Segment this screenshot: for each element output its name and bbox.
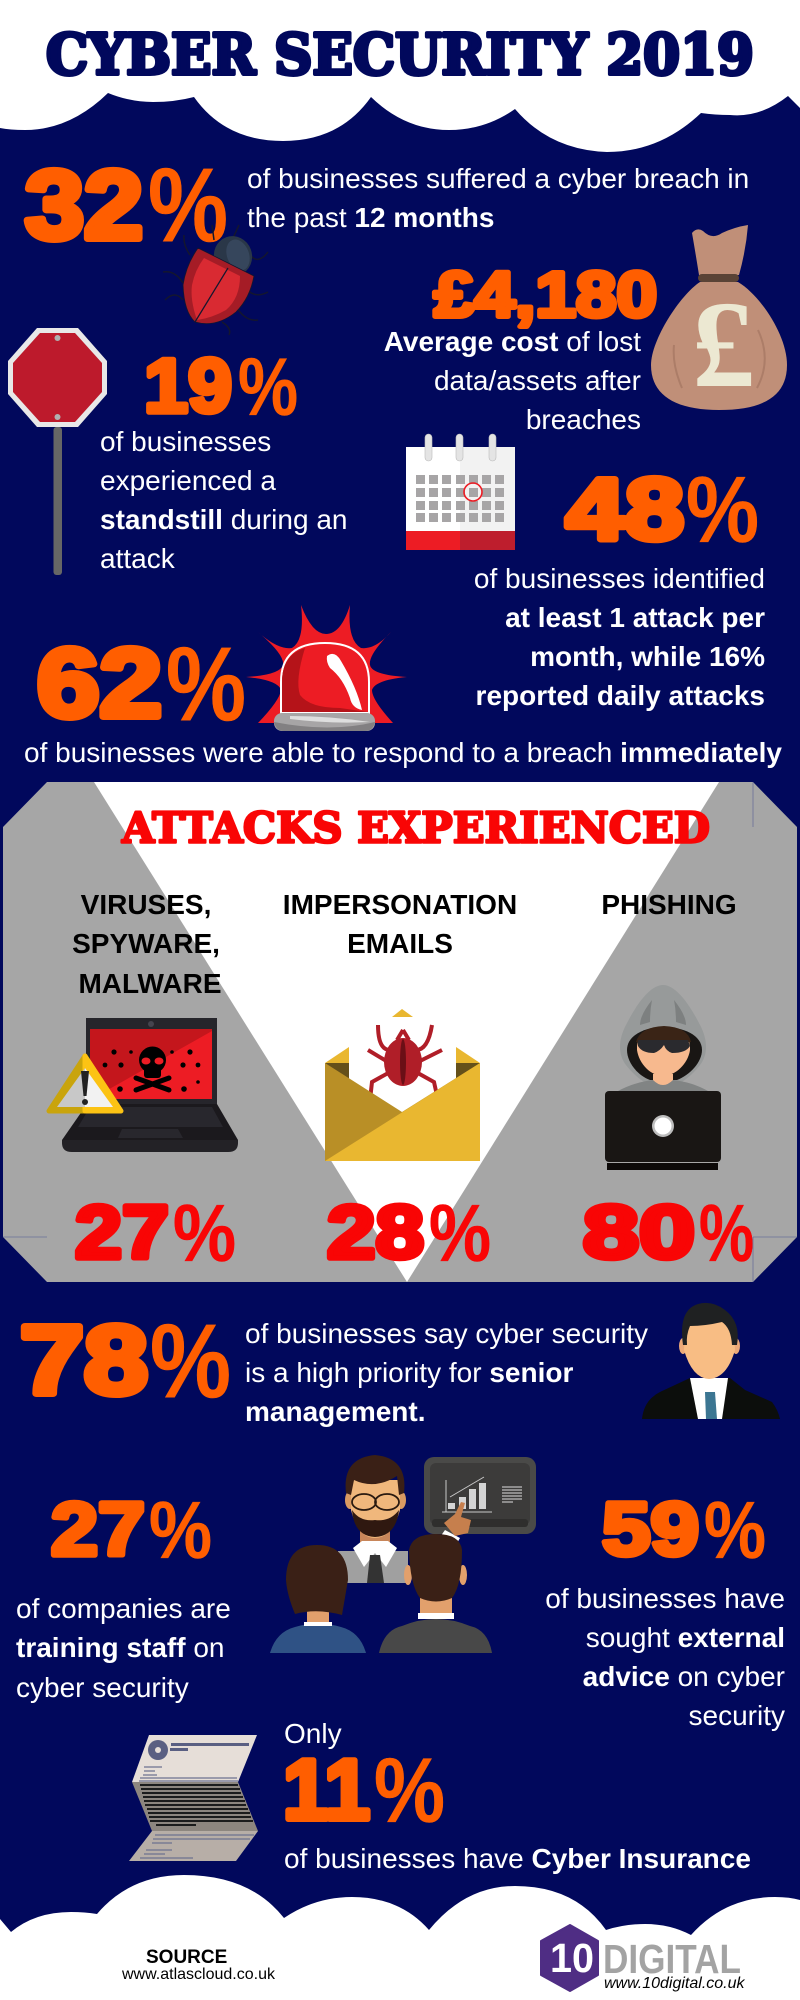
footer cloud	[0, 1875, 800, 2000]
stat: 78%: 78	[20, 1306, 148, 1414]
header cloud	[0, 0, 800, 152]
stat: 19%: 19	[144, 344, 232, 429]
text: training description: cyber security	[16, 1672, 189, 1703]
text: only: Only	[284, 1718, 342, 1749]
label: viruses: MALWARE	[78, 968, 222, 999]
panel: attacks experienced	[3, 782, 797, 1282]
label: impersonation emails: EMAILS	[347, 928, 453, 959]
text: external advice description: advice on cyber	[583, 1661, 785, 1692]
stat: 11%	[283, 1740, 445, 1842]
stat: 48%: 48	[566, 461, 684, 558]
icon: money bag	[651, 225, 787, 413]
stat: 27% training	[51, 1486, 212, 1576]
icon: envelope with bug	[325, 1009, 480, 1161]
stat: 80% phishing: %	[699, 1189, 754, 1279]
icon: infected laptop	[49, 1018, 238, 1152]
stat: 27% viruses	[75, 1189, 236, 1279]
label: viruses: VIRUSES,	[81, 889, 211, 920]
text: average cost description: Average cost of lost	[384, 326, 641, 357]
stat: 80% phishing	[583, 1189, 754, 1279]
stat: 19%	[144, 342, 298, 433]
source credit: SOURCE	[146, 1947, 227, 1968]
text: average cost description: breaches	[526, 404, 641, 435]
text: 48% description: reported daily attacks	[476, 680, 765, 711]
stat: 62%	[37, 626, 246, 743]
stat: 27% viruses: %	[173, 1189, 236, 1279]
source credit: www.atlascloud.co.uk	[121, 1966, 276, 1983]
text: training description: of companies are	[16, 1593, 231, 1624]
stat: 59%	[602, 1486, 766, 1576]
label: phishing: PHISHING	[601, 889, 737, 920]
text: 19% description: of businesses	[100, 426, 271, 457]
title: CYBER SECURITY 2019	[46, 22, 754, 88]
stat: 78%	[20, 1303, 231, 1420]
stat: 62%: %	[166, 626, 246, 743]
stat: 59%: 59	[602, 1487, 699, 1571]
stat: 28% impersonation	[327, 1189, 491, 1279]
stat: 32% breach: 32	[25, 150, 143, 260]
stat: 62%: 62	[37, 628, 162, 738]
text: 48% description: of businesses identified	[474, 563, 765, 594]
stat: 32% breach	[25, 147, 228, 264]
logo: 10 digital: www.10digital.co.uk	[604, 1975, 746, 1992]
stat: 27% training: 27	[51, 1487, 145, 1571]
icon: hacker	[605, 985, 721, 1170]
stat: 19%: %	[238, 342, 298, 433]
logo: 10 digital: 10	[550, 1935, 594, 1981]
text: 78% description: of businesses say cyber security	[245, 1318, 648, 1349]
stat: 48%	[566, 457, 759, 562]
logo: 10 digital: DIGITAL	[603, 1936, 741, 1982]
text: 32% description: the past 12 months	[247, 202, 494, 233]
text: 48% description: at least 1 attack per	[505, 602, 765, 633]
stat: 59%: %	[704, 1486, 766, 1576]
stat: 28% impersonation: %	[429, 1189, 491, 1279]
stat: 28% impersonation: 28	[327, 1190, 424, 1274]
text: average cost description: data/assets after	[434, 365, 641, 396]
stat: 80% phishing: 80	[583, 1190, 695, 1274]
icon: insurance document	[129, 1735, 258, 1861]
stat: 27% training: %	[149, 1486, 212, 1576]
stat: 27% viruses: 27	[75, 1190, 169, 1274]
illustration: presenter and audience	[270, 1455, 536, 1653]
icon: stop sign	[8, 328, 107, 575]
text: external advice description: security	[689, 1700, 785, 1731]
heading: attacks experienced: ATTACKS EXPERIENCED	[121, 804, 710, 852]
text: external advice description: of businesses have	[545, 1583, 785, 1614]
text: 19% description: experienced a	[100, 465, 276, 496]
stat: £4,180: £4,180	[434, 258, 657, 330]
stat: 48%: %	[686, 457, 759, 562]
source credit	[121, 1947, 276, 1983]
text: 78% description: management.	[245, 1396, 426, 1427]
logo: 10 digital	[541, 1925, 746, 1992]
text: external advice description: sought external	[586, 1622, 785, 1653]
text: 78% description: is a high priority for senior	[245, 1357, 573, 1388]
stat: 32% breach: %	[148, 147, 228, 264]
text: 62% description: of businesses were able to respond to a breach immediately	[24, 737, 782, 768]
icon: businessman	[642, 1303, 780, 1419]
text: cyber insurance description: of businesses have Cyber Insurance	[284, 1843, 751, 1874]
icon: bug	[163, 225, 268, 335]
text: 19% description: attack	[100, 543, 176, 574]
icon: alarm light	[246, 605, 407, 731]
icon: money bag: £	[692, 276, 755, 413]
text: 32% description: of businesses suffered a cyber breach in	[247, 163, 749, 194]
icon: calendar	[406, 434, 515, 550]
text: training description: training staff on	[16, 1632, 224, 1663]
stat: 78%: %	[150, 1303, 231, 1420]
label: viruses: SPYWARE,	[72, 928, 220, 959]
text: 48% description: month, while 16%	[530, 641, 765, 672]
text: 19% description: standstill during an	[100, 504, 347, 535]
stat: 11%: 11	[283, 1743, 370, 1838]
stat: 11%: %	[374, 1740, 445, 1842]
label: impersonation emails: IMPERSONATION	[283, 889, 517, 920]
